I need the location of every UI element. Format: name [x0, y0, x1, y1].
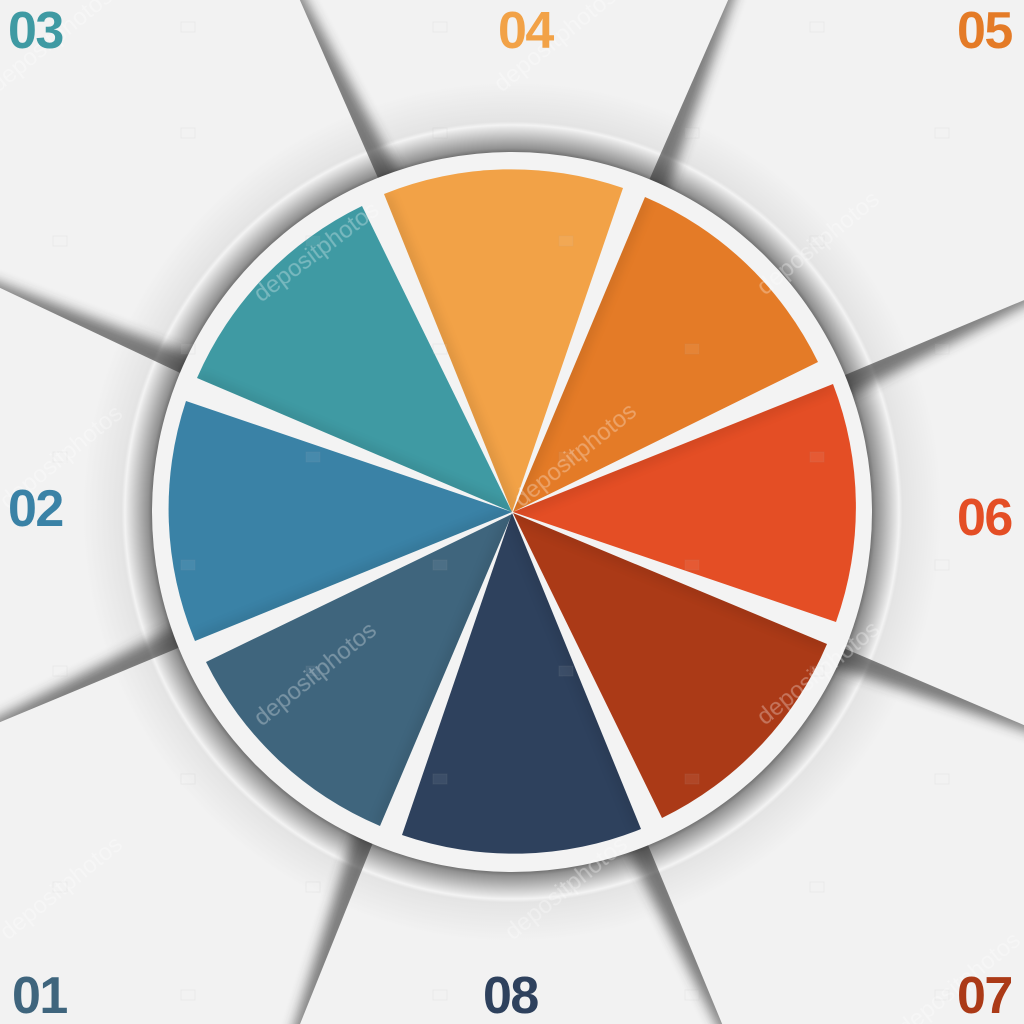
spoke between panels 04 and 05: [650, 0, 742, 190]
spoke between panels 01 and 02: [0, 624, 178, 722]
watermark text: depositphotos: [509, 398, 642, 513]
spoke between panels 06 and 07: [834, 648, 1024, 740]
watermark text: depositphotos: [249, 196, 384, 308]
watermark text: depositphotos: [752, 186, 885, 301]
pie chart with eight wedges: [169, 169, 856, 854]
spoke between panels 08 and 01: [285, 833, 372, 1024]
number 02: 02: [8, 480, 63, 538]
watermark text: depositphotos: [752, 616, 885, 731]
number 07: 07: [957, 967, 1012, 1024]
wedge 07: [513, 513, 827, 818]
spoke between panels 02 and 03: [0, 273, 190, 373]
spoke between panels 07 and 08: [624, 846, 722, 1024]
wedge 08: [402, 513, 641, 854]
spoke between panels 05 and 06: [845, 300, 1024, 400]
number 04: 04: [498, 2, 554, 60]
watermark text: depositphotos: [249, 617, 382, 732]
number 05: 05: [957, 2, 1012, 60]
watermark text: depositphotos: [500, 831, 633, 946]
wedge 03: [197, 206, 512, 512]
wedge 02: [169, 401, 512, 641]
wedge 01: [206, 514, 512, 826]
ring shadow around circle: [82, 82, 942, 942]
wedge 05: [513, 197, 818, 512]
number 06: 06: [957, 489, 1012, 547]
wedge 06: [513, 384, 856, 622]
spoke between panels 03 and 04: [300, 0, 402, 178]
number 08: 08: [483, 967, 538, 1024]
pie base disc: [152, 152, 872, 872]
number 03: 03: [8, 2, 63, 60]
number 01: 01: [12, 967, 67, 1024]
wedge 04: [384, 169, 623, 512]
